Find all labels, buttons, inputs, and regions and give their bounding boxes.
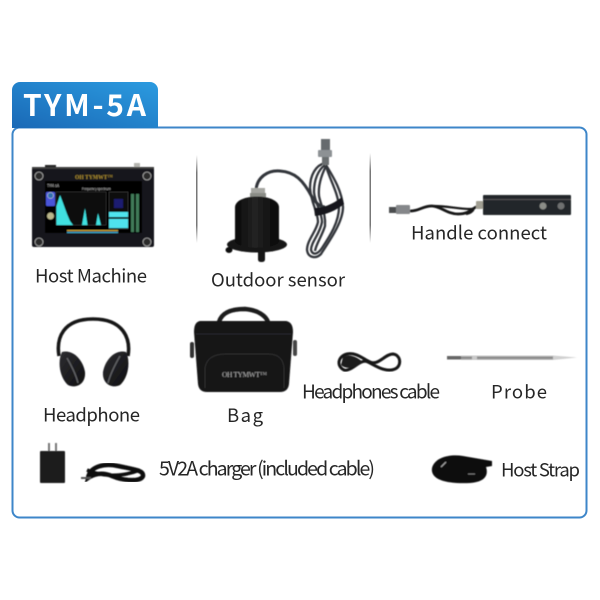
divider right of sensor [370, 153, 371, 243]
photo: outdoor sensor [226, 139, 344, 262]
photo: probe [447, 356, 577, 360]
label: Headphones cable: Headphones cable [302, 378, 440, 404]
label: Host Strap: Host Strap [501, 456, 580, 482]
label: Headphone: Headphone [43, 402, 140, 428]
title tab: TYM-5A: TYM-5A [23, 81, 147, 125]
photo: host strap [432, 455, 492, 483]
label: Probe: Probe [491, 378, 547, 404]
label: Handle connect: Handle connect [411, 220, 547, 246]
photo: host machine [32, 163, 154, 247]
label: Outdoor sensor: Outdoor sensor [211, 266, 346, 292]
photo: headphones cable [339, 354, 400, 370]
photo: bag: OH TYMWT™ [222, 370, 268, 379]
photo: charger cable [81, 465, 143, 480]
divider left of sensor [196, 155, 198, 243]
label: Host Machine: Host Machine [35, 262, 147, 288]
photo: bag [190, 309, 297, 392]
photo: host machine: Frequency spectrum [82, 187, 111, 191]
photo: host machine: TYM-5A [47, 184, 60, 189]
photo: host machine: OH TYMWT™ [75, 174, 113, 181]
photo: handle connect [389, 195, 571, 215]
photo: charger [40, 443, 65, 483]
label: charger: 5V2A charger (included cable) [159, 452, 375, 482]
photo: headphone [58, 319, 129, 386]
label: Bag: Bag [227, 402, 264, 428]
main panel [12, 128, 586, 518]
